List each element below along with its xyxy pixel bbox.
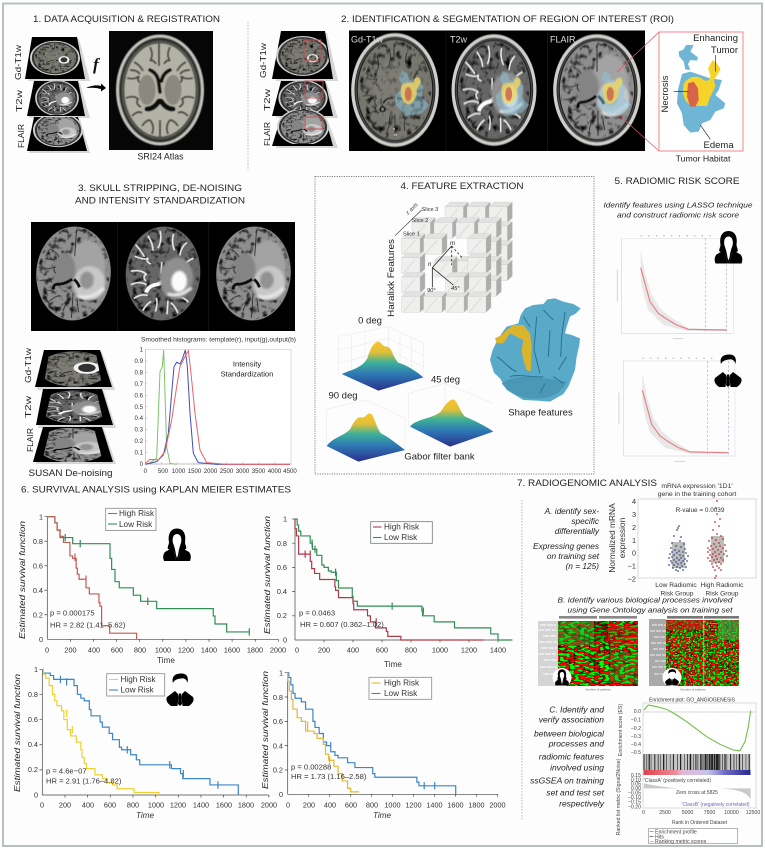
T2w segmented slice — [453, 36, 535, 144]
intensity histogram chart: 0 — [140, 461, 144, 468]
heading 6: 6. SURVIVAL ANALYSIS using KAPLAN MEIER ESTIMATES — [21, 484, 291, 494]
icon: man — [166, 674, 194, 706]
step C text: radiomic features — [539, 752, 605, 762]
KM chart: male training: 800 — [127, 800, 139, 810]
enrichment y ticks: −0.3 — [631, 734, 641, 740]
KM chart: male test: 0.4 — [273, 742, 283, 750]
intensity histogram chart: 0.6 — [135, 392, 144, 399]
KM chart: female training: 0.8 — [33, 537, 43, 546]
step A text: (n = 125) — [566, 561, 599, 571]
KM chart: male training: 0.2 — [28, 765, 38, 774]
panel 3: skull stripping, de-noising, standardization — [24, 183, 297, 479]
step A text: A. identify sex- — [545, 506, 599, 516]
high risk curve — [42, 669, 159, 795]
step C text: verify association — [539, 714, 604, 724]
label 0 deg: 0 deg — [358, 316, 382, 326]
KM chart: female test: 1000 — [432, 646, 448, 654]
3D tumor shape — [490, 298, 581, 402]
SRI24 atlas brain — [109, 31, 213, 150]
KM chart: female test: 200 — [318, 646, 330, 654]
label Gabor filter bank: Gabor filter bank — [404, 452, 475, 462]
legend: High Risk — [384, 522, 420, 532]
R-value label: R-value = 0.0039 — [676, 507, 725, 514]
statistics: HR = 1.73 (1.16–2.58) — [291, 772, 367, 781]
KM chart: male test: 2000 — [489, 800, 506, 810]
KM chart: female test: 0 — [295, 646, 299, 654]
KM chart: male training: 2000 — [261, 800, 277, 810]
blue output curve — [145, 350, 290, 464]
low-risk dots — [669, 526, 688, 571]
zero cross label: Zero cross at 5825 — [676, 790, 718, 796]
heading 1: 1. DATA ACQUISITION & REGISTRATION — [33, 14, 220, 24]
high risk group label: Risk Group — [706, 590, 739, 598]
legend: Low Risk — [120, 686, 155, 694]
y axis title: Estimated survival function — [13, 673, 22, 792]
high risk curve — [288, 673, 359, 792]
KM chart: female test: 400 — [347, 646, 359, 654]
heading 5: 5. RADIOMIC RISK SCORE — [614, 176, 740, 186]
step C text: between biological — [534, 728, 605, 738]
KM chart: male test: 200 — [303, 800, 315, 810]
KM chart: male test — [273, 668, 506, 810]
intensity histogram chart: 0.9 — [135, 358, 144, 365]
GLCM direction arrows — [432, 246, 453, 287]
KM chart: male training: 600 — [104, 800, 116, 810]
z axis line — [395, 210, 422, 236]
modality label: FLAIR: FLAIR — [263, 122, 272, 146]
icon: woman — [715, 231, 742, 264]
LASSO plot: male cohort — [619, 358, 735, 461]
statistics: HR = 2.91 (1.76–4.82) — [46, 776, 122, 786]
enrichment y ticks — [628, 709, 641, 810]
statistics: p = 0.00288 — [291, 762, 331, 772]
enrichment x ticks: 0 — [642, 810, 645, 816]
KM chart: male training: 0.4 — [28, 740, 38, 749]
label 90 degrees: 90° — [427, 288, 436, 294]
legend — [107, 674, 165, 696]
group labels: Risk Group — [661, 590, 694, 598]
scatter title: mRNA expression '1D1' — [661, 483, 733, 490]
label Enhancing Tumor: Enhancing — [693, 33, 738, 44]
KM chart: male training: 1 — [34, 665, 38, 674]
x axis title: Time — [373, 811, 392, 820]
KM chart: female training: 0 — [39, 635, 43, 644]
intensity histogram chart: 2000 — [204, 468, 218, 475]
scatter plot: 3 — [632, 510, 636, 519]
heatmap: male: Number of patients — [680, 688, 706, 692]
step B text: B. Identify various biological processes involved — [558, 596, 733, 604]
dashed panel outline — [315, 176, 594, 474]
caption Tumor Habitat: Tumor Habitat — [676, 154, 731, 164]
KM chart: female test: 0.6 — [277, 563, 287, 572]
KM chart: male training: 0.6 — [28, 715, 38, 724]
red template curve — [145, 351, 290, 464]
intensity histogram chart: 0.4 — [135, 415, 144, 422]
KM chart: male training: 400 — [82, 800, 94, 810]
MRI stack with ROI boxes — [272, 31, 338, 148]
KM chart: male training: 1800 — [238, 800, 254, 810]
KM chart: female training: 1400 — [201, 646, 217, 654]
step C text: processes and — [548, 738, 604, 748]
KM chart: male test: 0.6 — [273, 717, 283, 726]
y axis title: Estimated survival function — [18, 520, 27, 639]
panel 6: Kaplan-Meier survival analysis — [13, 484, 512, 820]
label T2w: T2w — [450, 34, 468, 44]
enrichment y ticks: −0.10 — [628, 795, 641, 801]
enrichment y ticks: −0.1 — [631, 718, 641, 724]
intensity histogram chart: 0 — [144, 468, 148, 475]
icon: woman — [163, 528, 191, 561]
statistics: p = 0.000175 — [50, 608, 95, 618]
divider: panels 1 and 2 — [247, 22, 249, 170]
LASSO description: Identify features using LASSO technique — [604, 200, 752, 210]
intensity histogram chart: 1000 — [172, 468, 186, 475]
enrichment legend: Ranking metric scores — [655, 839, 707, 845]
KM chart: female training: 2000 — [270, 646, 286, 654]
LASSO plot: female cohort — [617, 236, 733, 339]
step C text: ssGSEA on training — [530, 776, 604, 786]
KM chart: female training — [33, 512, 286, 654]
KM chart: female test: 1 — [283, 514, 287, 524]
label intensity standardization: Standardization — [221, 370, 273, 378]
label m: m — [450, 241, 455, 247]
KM chart: male test: 1000 — [384, 800, 401, 810]
legend — [371, 522, 432, 543]
legend — [369, 677, 432, 699]
high risk group label: High Radiomic — [701, 582, 743, 589]
KM chart: male test: 400 — [324, 800, 336, 810]
legend: High Risk — [384, 678, 420, 688]
scatter plot: 1 — [632, 536, 636, 545]
label z axis: z axis — [404, 202, 420, 217]
heatmap: male — [649, 617, 739, 692]
dashed direction lines — [452, 246, 463, 265]
step C text: C. Identify and — [549, 704, 604, 714]
modality label: Gd-T1w: Gd-T1w — [14, 45, 23, 80]
Gd-T1w segmented slice — [353, 35, 437, 145]
scatter y-axis title: Normalized mRNA — [607, 503, 617, 573]
divider: panel 7 — [521, 500, 523, 820]
ES curve — [644, 705, 751, 751]
intensity histogram chart: 0.2 — [135, 438, 144, 445]
modality label: T2w: T2w — [15, 90, 24, 112]
step B text: using Gene Ontology analysis on training set — [568, 606, 733, 614]
panel 1: data acquisition and registration — [14, 14, 220, 162]
modality label: FLAIR: FLAIR — [26, 428, 35, 452]
scatter title: gene in the training cohort — [658, 491, 736, 498]
KM chart: female training: 0.6 — [33, 562, 43, 570]
intensity histogram chart: 1 — [140, 346, 144, 354]
heatmap: female — [538, 617, 638, 692]
legend: High Risk — [120, 675, 156, 684]
enrichment y ticks: −0.2 — [631, 726, 641, 732]
KM chart: female test: 0.2 — [277, 611, 287, 620]
histogram caption: Smoothed histograms: template(r), input(g),output(b) — [141, 336, 296, 344]
step C text: involved using — [550, 762, 604, 772]
Haralick cube grid — [402, 202, 512, 312]
modality label: Gd-T1w: Gd-T1w — [24, 348, 33, 383]
KM chart: female training: 0.4 — [33, 586, 43, 595]
heading 3: AND INTENSITY STANDARDIZATION — [75, 196, 245, 206]
KM chart: male test: 0.8 — [273, 693, 283, 702]
KM chart: male training — [28, 665, 277, 810]
statistics: HR = 0.607 (0.362–1.02) — [300, 620, 384, 629]
KM chart: female test: 1400 — [490, 646, 506, 654]
gene ranking strip — [644, 770, 750, 775]
KM chart: female training: 1000 — [155, 646, 171, 654]
enrichment title: Enrichment plot: GO_ANGIOGENESIS — [649, 698, 735, 704]
green input curve — [145, 350, 177, 464]
enrichment x ticks: 10000 — [724, 810, 739, 816]
necrosis habitat — [687, 82, 699, 107]
KM chart: female test: 0.8 — [277, 539, 287, 548]
KM chart: male training: 1600 — [216, 800, 232, 810]
KM chart: male test: 1600 — [447, 800, 464, 810]
KM chart: female test: 600 — [376, 646, 388, 654]
KM chart: male training: 1400 — [193, 800, 209, 810]
hit barcode — [644, 754, 750, 770]
KM chart: male training: 1000 — [148, 800, 164, 810]
enrichment x ticks — [642, 810, 760, 816]
heading 3: 3. SKULL STRIPPING, DE-NOISING — [78, 183, 242, 193]
enrichment score axis title: Enrichment score (ES) — [618, 704, 624, 756]
legend: Low Risk — [119, 520, 153, 529]
enrichment y ticks: −0.05 — [628, 790, 641, 796]
heading 7: 7. RADIOGENOMIC ANALYSIS — [517, 478, 657, 488]
intensity histogram chart: 0.1 — [135, 450, 144, 457]
KM chart: female training: 200 — [64, 646, 77, 654]
label Slice 3: Slice 3 — [422, 207, 438, 213]
statistics: HR = 2.82 (1.41–5.62) — [50, 620, 126, 630]
high risk curve — [47, 517, 137, 639]
KM chart: female training: 0.2 — [33, 610, 43, 620]
KM chart: male training: 0 — [34, 790, 38, 800]
intensity histogram chart: 1500 — [188, 468, 202, 475]
label Edema: Edema — [704, 140, 734, 151]
label 45 degrees: 45° — [451, 286, 460, 292]
KM chart: male test: 1800 — [468, 800, 485, 810]
enrichment legend — [648, 828, 738, 845]
KM chart: female training: 1200 — [178, 646, 194, 654]
intensity histogram chart: 2500 — [220, 468, 234, 475]
x axis title: Time — [384, 660, 402, 669]
heading 2: 2. IDENTIFICATION & SEGMENTATION OF REGION OF INTEREST (ROI) — [341, 14, 674, 24]
enrichment y ticks: −0.5 — [631, 750, 641, 756]
label n: n — [428, 262, 432, 268]
label Gd-T1w: Gd-T1w — [351, 34, 384, 44]
scatter plot — [628, 497, 756, 584]
label 90 deg: 90 deg — [328, 390, 358, 402]
KM chart: female test — [277, 514, 512, 654]
KM chart: male test: 1 — [279, 668, 283, 678]
atlas caption: SRI24 Atlas — [138, 152, 184, 162]
enrichment x ticks: 12500 — [746, 810, 760, 816]
x axis title: Rank in Ordered Dataset — [672, 820, 728, 826]
KM chart: female training: 800 — [134, 646, 146, 654]
KM chart: male training: 0.8 — [28, 690, 38, 699]
y axis title: Estimated survival function — [263, 515, 272, 634]
intensity histogram chart: 4000 — [268, 468, 282, 475]
low risk curve — [295, 519, 512, 640]
label intensity standardization: Intensity — [233, 360, 261, 368]
KM chart: female training: 1600 — [224, 646, 240, 654]
step A text: differentially — [555, 526, 600, 536]
KM chart: female training: 0 — [45, 646, 49, 654]
modality label: FLAIR: FLAIR — [17, 124, 26, 148]
x axis title: Time — [157, 656, 175, 665]
x axis title: Time — [136, 811, 155, 820]
label Necrosis: Necrosis — [660, 75, 671, 112]
panel 5: radiomic risk score — [604, 176, 752, 461]
enrichment y ticks: 0.15 — [631, 773, 641, 779]
KM chart: male training: 1200 — [170, 800, 186, 810]
statistics: p = 0.0463 — [299, 608, 335, 618]
intensity histogram chart — [135, 346, 297, 475]
label Shape features: Shape features — [508, 408, 573, 418]
skull-stripped MRI row — [31, 222, 295, 331]
intensity histogram chart: 0.3 — [135, 427, 144, 434]
KM chart: male test: 0.2 — [273, 766, 283, 774]
scatter plot: −1 — [628, 562, 636, 571]
panel 7: radiogenomic analysis — [517, 478, 760, 845]
KM chart: female training: 600 — [111, 646, 123, 654]
intensity histogram chart: 0.8 — [135, 369, 144, 376]
enrichment y ticks: 0.0 — [634, 709, 641, 715]
label Slice 1: Slice 1 — [403, 232, 420, 238]
group labels: Low Radiomic — [655, 582, 697, 589]
FLAIR segmented slice — [555, 36, 639, 144]
statistics: p = 4.6e−07 — [46, 766, 87, 776]
step A text: Expressing genes — [533, 541, 599, 551]
zoom connector lines — [617, 32, 659, 151]
KM chart: male test: 1400 — [426, 800, 443, 810]
high-risk dots — [708, 501, 727, 578]
scatter y-axis title: expression — [617, 517, 627, 558]
low risk curve — [47, 517, 249, 636]
enrichment y ticks: −0.4 — [631, 742, 641, 748]
enrichment x ticks: 2500 — [659, 810, 671, 816]
enrichment plot — [616, 698, 760, 845]
tumor habitat box — [659, 32, 743, 151]
intensity histogram chart: 500 — [158, 468, 169, 475]
intensity histogram chart: 3500 — [252, 468, 266, 475]
class B label: 'ClassB' (negatively correlated) — [682, 802, 750, 808]
Gabor surface walls — [327, 327, 493, 450]
ranked metric axis title: Ranked list metric (Signal2Noise) — [616, 758, 622, 835]
KM chart: male training: 200 — [59, 800, 71, 810]
enrichment legend: Hits — [655, 834, 664, 840]
transform symbol f: f — [93, 55, 101, 74]
legend: Low Risk — [384, 533, 418, 542]
KM chart: female training: 1 — [39, 512, 43, 522]
KM chart: male test: 0 — [279, 790, 283, 799]
scatter plot: −2 — [628, 574, 636, 584]
modality label: Gd-T1w: Gd-T1w — [259, 43, 268, 78]
step C text: respectively — [559, 798, 605, 808]
KM chart: male test: 800 — [366, 800, 378, 810]
KM chart: female test: 0.4 — [277, 587, 287, 596]
intensity histogram chart: 4500 — [283, 468, 297, 475]
enrichment y ticks: 0.00 — [631, 786, 641, 792]
enrichment y ticks: −0.20 — [628, 804, 641, 810]
label Haralick features: Haralixk Features — [386, 239, 396, 317]
MRI stack — [25, 37, 90, 153]
Gabor surface 0 deg — [342, 342, 423, 391]
KM chart: female test: 1200 — [461, 646, 477, 654]
LASSO description: and construct radiomic risk score — [617, 210, 739, 220]
enhancing tumor habitat — [683, 60, 721, 106]
label FLAIR: FLAIR — [550, 34, 576, 44]
KM chart: male training: 0 — [40, 800, 44, 810]
step A text: specific — [571, 516, 600, 526]
scatter plot: 2 — [632, 523, 636, 532]
edema habitat — [677, 45, 725, 133]
scatter plot: 0 — [632, 549, 636, 558]
intensity histogram chart: 0.5 — [135, 404, 144, 411]
arrow to atlas — [86, 84, 106, 92]
class labels: 'ClassA' (positively correlated) — [644, 778, 711, 784]
KM chart: male test: 600 — [345, 800, 357, 810]
modality label: T2w: T2w — [263, 89, 272, 111]
high risk curve — [295, 519, 484, 640]
icon: man — [714, 354, 742, 387]
enrichment y ticks: −0.15 — [628, 800, 641, 806]
legend — [106, 508, 156, 531]
modality label: T2w: T2w — [24, 396, 33, 418]
enrichment legend: Enrichment profile — [655, 830, 697, 836]
step A text: on training set — [547, 551, 600, 561]
legend: Low Risk — [384, 689, 418, 698]
heading 4: 4. FEATURE EXTRACTION — [400, 181, 524, 191]
low risk curve — [42, 669, 238, 795]
KM chart: female training: 400 — [88, 646, 100, 654]
label Enhancing Tumor: Tumor — [711, 45, 738, 56]
KM chart: male test: 0 — [286, 800, 290, 810]
metric area — [644, 783, 751, 799]
enrichment x ticks: 7500 — [704, 810, 715, 816]
panel 4: feature extraction — [315, 176, 594, 474]
KM chart: female test: 800 — [405, 646, 417, 654]
KM chart: female test: 0 — [283, 636, 287, 644]
scatter plot: 4 — [632, 497, 636, 506]
enrichment y ticks: 0.05 — [631, 782, 641, 788]
panel 2: identification and segmentation of ROI — [259, 14, 743, 164]
y axis title: Estimated survival function — [261, 670, 270, 789]
segmented MRI row — [349, 30, 645, 151]
label 45 deg: 45 deg — [431, 374, 460, 386]
Gabor surface 90 deg — [327, 413, 405, 462]
low risk curve — [288, 673, 456, 794]
caption SUSAN de-noising: SUSAN De-noising — [28, 468, 112, 479]
intensity histogram chart: 3000 — [236, 468, 250, 475]
KM chart: male test: 1200 — [405, 800, 422, 810]
enrichment y ticks: 0.10 — [631, 777, 641, 783]
heatmap: female: Number of patients — [585, 688, 611, 692]
step C text: set and test set — [546, 788, 605, 798]
label Slice 2: Slice 2 — [412, 218, 428, 224]
KM chart: female training: 1800 — [247, 646, 263, 654]
de-noised MRI stack — [33, 350, 116, 464]
intensity histogram chart: 0.7 — [135, 381, 144, 388]
enrichment x ticks: 5000 — [682, 810, 693, 816]
Gabor surface 45 deg — [410, 399, 493, 447]
legend: High Risk — [119, 509, 155, 518]
